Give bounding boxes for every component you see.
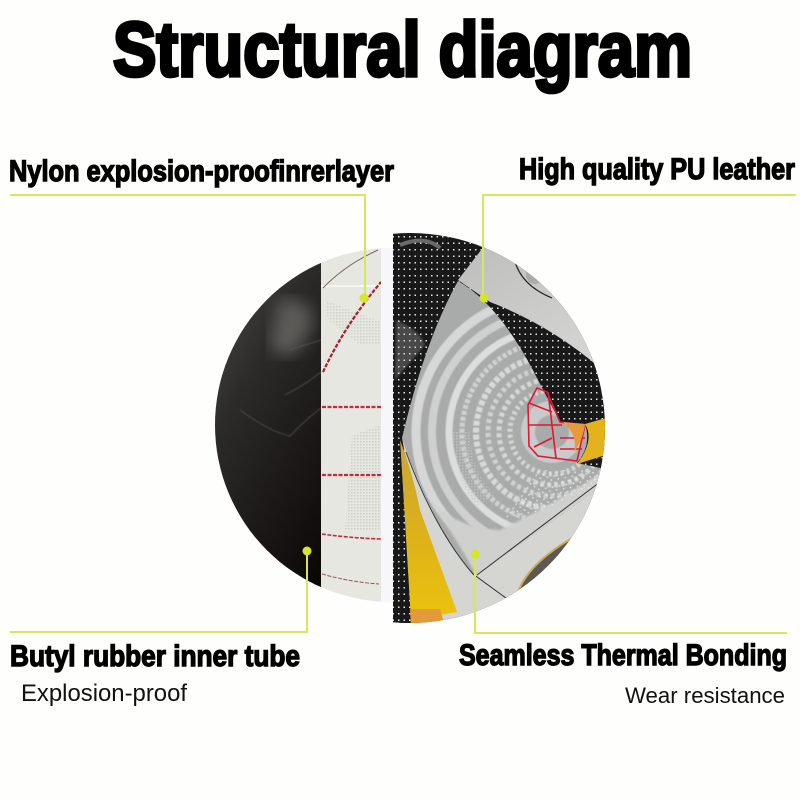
red stitching [322,250,381,584]
black dotted base [393,230,613,630]
callout: butyl rubber inner tube: Explosion-proof [21,680,187,707]
callout: seamless thermal bonding: Wear resistance [625,683,785,708]
callout: butyl rubber inner tube [10,546,312,707]
red printed panel [528,388,585,461]
top silver panel [458,248,594,363]
title: Structural diagram [113,7,692,93]
panel: PU leather outer shell [393,233,605,623]
top panel print [515,264,552,298]
dotted band [506,470,600,518]
black dotted strip [393,432,411,625]
lower grey panel [402,438,594,621]
yellow panel [400,440,457,620]
callout: high quality PU leather [480,153,796,302]
white seam strip [381,248,383,602]
dark oval patch [518,537,572,591]
orange patch bottom [410,609,444,623]
woven arc [452,432,495,505]
panel: nylon interlayer [321,248,381,602]
rim sheen at lower fan [444,474,600,575]
callout: nylon explosion-proof interlayer: Nylon explosion-proofinrerlayer [9,155,394,188]
callout: seamless thermal bonding [459,550,787,708]
callout: butyl rubber inner tube: Butyl rubber inner tube [10,640,300,673]
panel: black rubber inner tube [215,248,383,602]
callout: nylon explosion-proof interlayer [9,155,394,302]
ball cross-section [215,233,605,623]
yellow accent right [577,418,606,464]
silver fan panel [402,281,601,575]
